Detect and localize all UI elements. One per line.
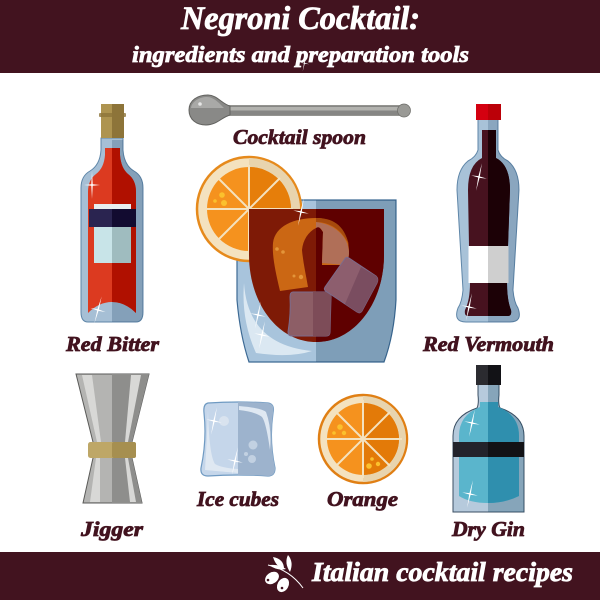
icon: dry gin bottle xyxy=(453,365,525,513)
icon: olive branch xyxy=(263,555,303,594)
orange slice on rim xyxy=(197,157,301,261)
icon: orange slice xyxy=(319,395,407,483)
title: Negroni Cocktail: xyxy=(180,1,420,37)
icon: negroni glass with orange slice and ice xyxy=(197,157,396,362)
orange peel in drink xyxy=(273,218,349,291)
icon: red bitter bottle xyxy=(81,104,144,326)
ice cube 1 xyxy=(288,292,331,336)
label: ice cubes: Ice cubes xyxy=(196,487,279,511)
footer text: Italian cocktail recipes xyxy=(311,557,573,587)
header banner xyxy=(0,0,600,73)
footer banner xyxy=(0,552,600,600)
subtitle: ingredients and preparation tools xyxy=(132,42,469,67)
label: red bitter: Red Bitter xyxy=(65,332,160,356)
ice cube 2 xyxy=(324,257,378,313)
label: orange: Orange xyxy=(327,487,398,511)
glass highlight xyxy=(244,283,312,355)
label: cocktail spoon: Cocktail spoon xyxy=(233,125,366,149)
label: jigger: Jigger xyxy=(80,517,144,541)
icon: red vermouth bottle xyxy=(298,54,522,324)
glass body xyxy=(237,200,396,362)
icon: jigger xyxy=(76,374,149,503)
icon: cocktail spoon xyxy=(189,95,410,125)
label: red vermouth: Red Vermouth xyxy=(422,332,554,356)
liquid xyxy=(249,209,384,342)
label: dry gin: Dry Gin xyxy=(451,517,525,541)
icon: ice cube xyxy=(201,398,278,480)
